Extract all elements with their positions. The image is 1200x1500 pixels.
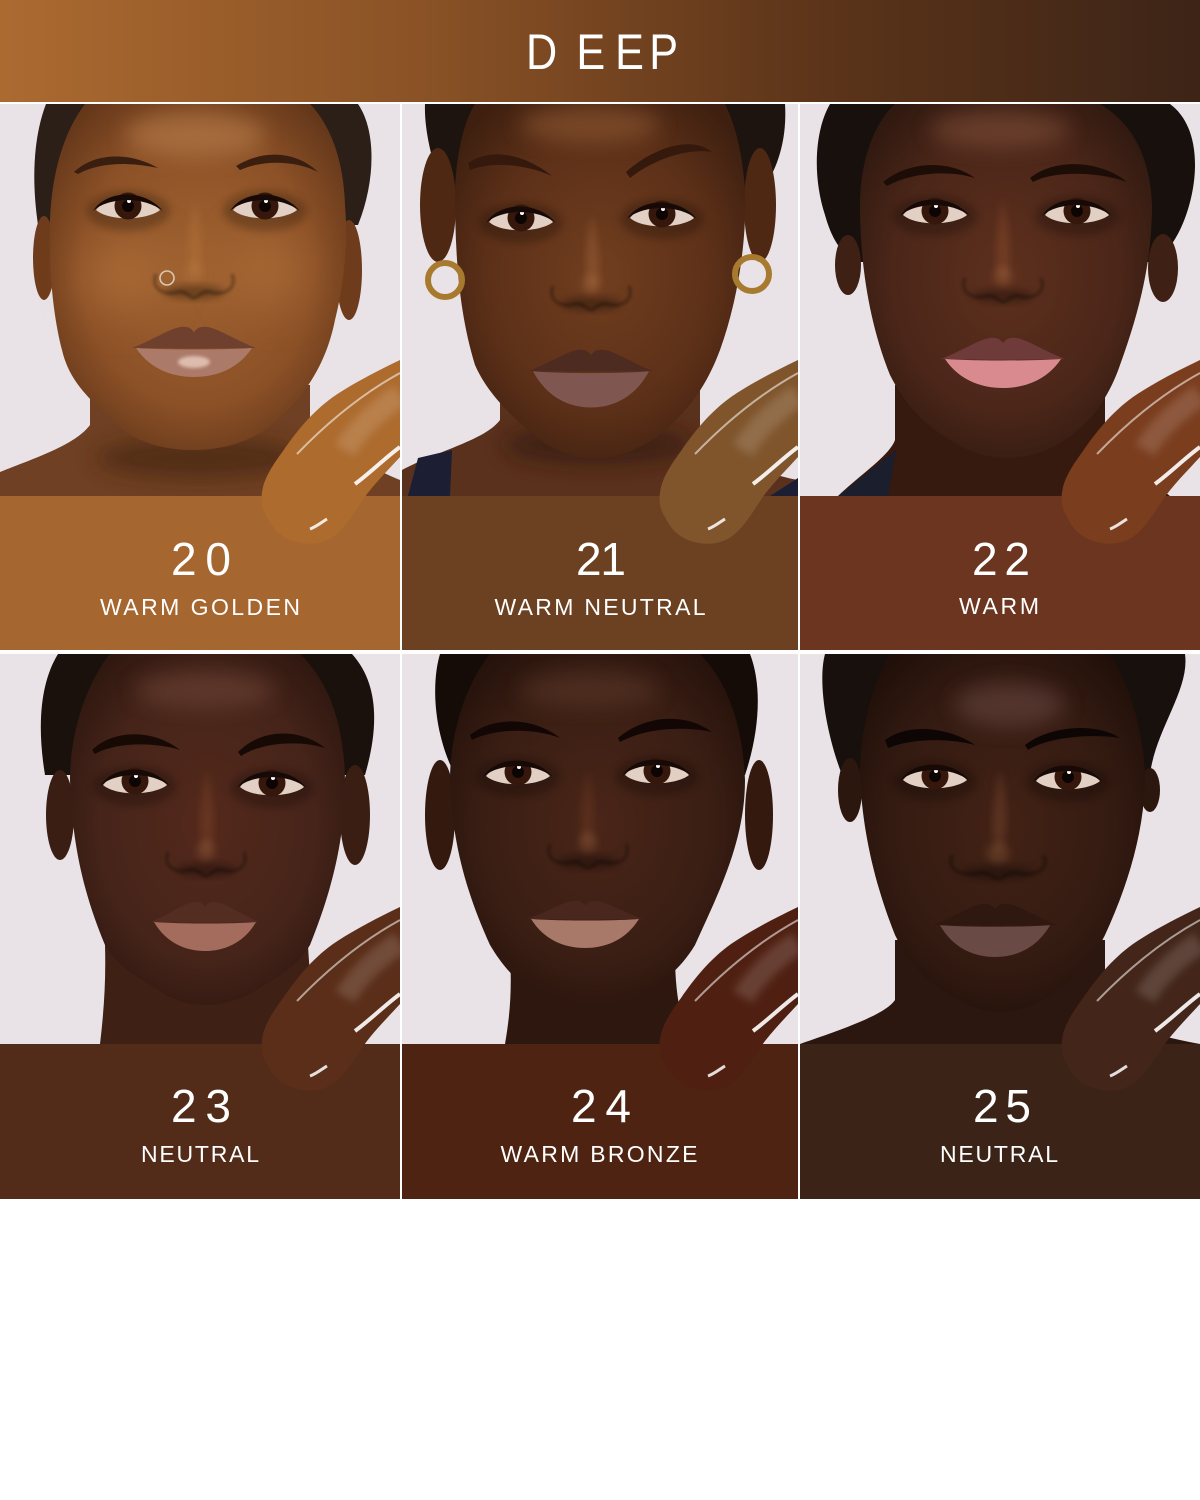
name: warm bronze: WARM BRONZE xyxy=(500,1141,698,1167)
swatch: shade 24 xyxy=(660,907,798,1091)
swatch: shade 25 xyxy=(1062,907,1200,1091)
colour block: shade 25 xyxy=(800,1044,1200,1199)
colour block: shade 20 xyxy=(0,496,400,650)
number 25: 25 xyxy=(973,1080,1031,1132)
portrait: shade 24 xyxy=(402,654,798,1044)
colour block: shade 24 xyxy=(402,1044,798,1199)
portrait: shade 21 xyxy=(402,104,798,496)
panel: shade 21 xyxy=(402,104,798,650)
portrait: shade 22 xyxy=(800,104,1200,496)
swatch: shade 21 xyxy=(660,360,798,544)
number 21: 21 xyxy=(576,533,626,585)
portrait: shade 20 xyxy=(0,104,400,496)
swatch: shade 20 xyxy=(262,360,400,544)
colour block: shade 22 xyxy=(800,496,1200,650)
swatch: shade 23 xyxy=(262,907,400,1091)
colour block: shade 23 xyxy=(0,1044,400,1199)
header banner xyxy=(0,0,1200,102)
number 23: 23 xyxy=(171,1080,231,1132)
panel: shade 24 xyxy=(402,654,798,1199)
panel: shade 23 xyxy=(0,654,400,1199)
name: neutral: NEUTRAL xyxy=(940,1141,1058,1167)
title: DEEP xyxy=(526,24,678,80)
colour block: shade 21 xyxy=(402,496,798,650)
name: warm neutral: WARM NEUTRAL xyxy=(494,594,706,620)
portrait: shade 25 xyxy=(800,654,1200,1044)
name: neutral: NEUTRAL xyxy=(141,1141,259,1167)
panel: shade 20 xyxy=(0,104,400,650)
panel: shade 22 xyxy=(800,104,1200,650)
panel: shade 25 xyxy=(800,654,1200,1199)
number 24: 24 xyxy=(571,1080,631,1132)
name: warm golden: WARM GOLDEN xyxy=(100,594,300,620)
number 20: 20 xyxy=(171,533,231,585)
number 22: 22 xyxy=(972,533,1030,585)
name: warm: WARM xyxy=(959,593,1039,619)
portrait: shade 23 xyxy=(0,654,400,1044)
swatch: shade 22 xyxy=(1062,360,1200,544)
